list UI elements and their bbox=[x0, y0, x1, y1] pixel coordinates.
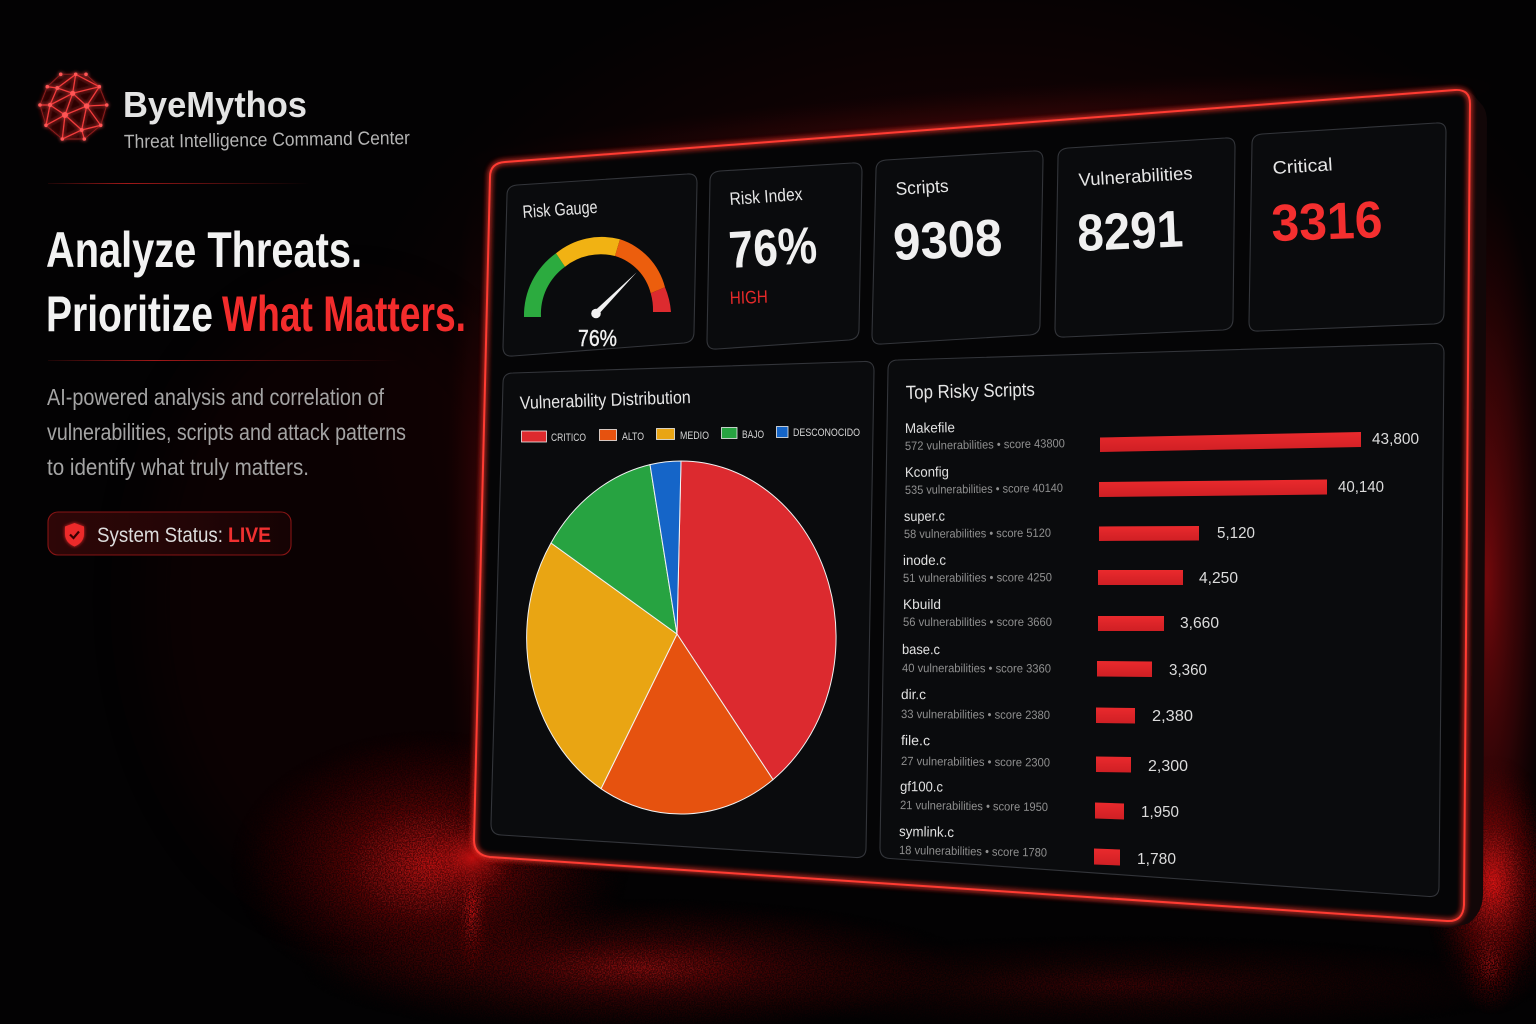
row: Makefile bbox=[905, 419, 1419, 453]
panel: risk gauge bbox=[503, 174, 697, 356]
description paragraph bbox=[47, 384, 406, 480]
brand tagline: Threat Intelligence Command Center bbox=[124, 128, 411, 153]
row: dir.c bbox=[901, 686, 1193, 725]
neon edge bbox=[474, 90, 1470, 921]
row: Kbuild bbox=[903, 596, 1219, 632]
row: symlink.c: symlink.c bbox=[899, 823, 954, 840]
row: super.c: super.c bbox=[904, 508, 945, 524]
row: inode.c: 51 vulnerabilities • score 4250 bbox=[903, 570, 1052, 585]
row: inode.c: 4,250 bbox=[1199, 570, 1238, 587]
legend bbox=[522, 426, 860, 444]
row: super.c: 5,120 bbox=[1217, 525, 1255, 542]
row: file.c: 2,300 bbox=[1148, 758, 1188, 775]
status pill bbox=[48, 512, 291, 555]
row: gf100.c: 1,950 bbox=[1141, 804, 1179, 821]
panel: risk gauge: Risk Gauge bbox=[522, 197, 598, 222]
row: gf100.c bbox=[900, 778, 1179, 821]
row: Kconfig: 40,140 bbox=[1338, 479, 1384, 496]
description paragraph: AI-powered analysis and correlation of bbox=[47, 384, 385, 410]
row: base.c: 3,360 bbox=[1169, 662, 1207, 679]
dashboard screen bbox=[474, 90, 1487, 928]
panel: risk gauge: 76% bbox=[578, 325, 617, 351]
row: super.c bbox=[904, 508, 1255, 542]
panel: vulnerability distribution bbox=[491, 361, 874, 858]
row: dir.c: 2,380 bbox=[1152, 708, 1193, 725]
row: Makefile: 572 vulnerabilities • score 43800 bbox=[905, 436, 1065, 453]
screen face bbox=[474, 90, 1470, 921]
row: file.c: file.c bbox=[901, 732, 930, 748]
panel: vulnerabilities: 8291 bbox=[1076, 200, 1184, 263]
legend: BAJO bbox=[742, 429, 764, 441]
row: base.c bbox=[902, 641, 1207, 679]
row: base.c: 40 vulnerabilities • score 3360 bbox=[902, 661, 1051, 676]
panel: scripts: 9308 bbox=[892, 209, 1003, 272]
row: inode.c bbox=[903, 552, 1238, 587]
row: Kconfig bbox=[905, 463, 1384, 497]
panel: risk index: Risk Index bbox=[729, 184, 803, 209]
row: inode.c: inode.c bbox=[903, 552, 946, 568]
row: Makefile: Makefile bbox=[905, 419, 955, 436]
screen bezel bbox=[474, 90, 1487, 928]
panel: risk index: HIGH bbox=[729, 287, 768, 308]
legend: ALTO bbox=[622, 431, 644, 443]
row: symlink.c: 1,780 bbox=[1137, 851, 1176, 868]
panel: vulnerability distribution: Vulnerability Distribution bbox=[519, 387, 691, 413]
row: dir.c: 33 vulnerabilities • score 2380 bbox=[901, 707, 1050, 722]
row: Kconfig: Kconfig bbox=[905, 463, 949, 480]
row: base.c: base.c bbox=[902, 641, 940, 657]
panel: critical: 3316 bbox=[1270, 191, 1383, 253]
panel: top risky scripts bbox=[880, 343, 1444, 897]
gauge arc bbox=[524, 237, 671, 317]
panel: critical bbox=[1249, 123, 1446, 331]
row: Kbuild: 3,660 bbox=[1180, 615, 1219, 632]
row: Kbuild: Kbuild bbox=[903, 596, 941, 612]
panel: vulnerabilities bbox=[1055, 138, 1235, 337]
pie chart bbox=[527, 461, 836, 814]
row: Kbuild: 56 vulnerabilities • score 3660 bbox=[903, 615, 1052, 629]
panel: vulnerabilities: Vulnerabilities bbox=[1078, 163, 1193, 190]
panel: top risky scripts: Top Risky Scripts bbox=[906, 380, 1035, 404]
headline: Analyze Threats. bbox=[46, 222, 362, 278]
panel: scripts bbox=[872, 151, 1043, 344]
row: symlink.c bbox=[899, 823, 1176, 868]
legend: CRITICO bbox=[551, 432, 586, 444]
row: super.c: 58 vulnerabilities • score 5120 bbox=[904, 526, 1051, 541]
row: Kconfig: 535 vulnerabilities • score 40140 bbox=[905, 481, 1063, 497]
status pill: LIVE bbox=[228, 524, 271, 547]
row: dir.c: dir.c bbox=[901, 686, 926, 702]
panel: critical: Critical bbox=[1272, 154, 1333, 178]
status pill: System Status: bbox=[97, 524, 223, 547]
panel: scripts: Scripts bbox=[895, 176, 949, 199]
headline: Prioritize bbox=[46, 286, 213, 342]
divider bbox=[48, 360, 400, 361]
row: gf100.c: gf100.c bbox=[900, 778, 943, 795]
legend: DESCONOCIDO bbox=[793, 427, 860, 439]
description paragraph: vulnerabilities, scripts and attack patterns bbox=[47, 419, 406, 445]
brand name: ByeMythos bbox=[123, 84, 307, 125]
description paragraph: to identify what truly matters. bbox=[47, 454, 309, 480]
row: file.c bbox=[901, 732, 1188, 775]
icon: shield check bbox=[65, 523, 84, 546]
row: gf100.c: 21 vulnerabilities • score 1950 bbox=[900, 798, 1048, 814]
gauge needle bbox=[591, 272, 637, 318]
panel: risk index bbox=[707, 163, 862, 349]
legend: MEDIO bbox=[680, 430, 709, 442]
headline: What Matters. bbox=[222, 286, 466, 342]
floor glow reflection bbox=[230, 730, 1536, 1024]
row: Makefile: 43,800 bbox=[1372, 431, 1419, 448]
divider bbox=[48, 183, 310, 184]
row: file.c: 27 vulnerabilities • score 2300 bbox=[901, 754, 1050, 770]
logo: network sphere bbox=[38, 72, 109, 141]
row: symlink.c: 18 vulnerabilities • score 1780 bbox=[899, 843, 1047, 860]
headline bbox=[46, 222, 466, 342]
panel: risk index: 76% bbox=[727, 217, 819, 280]
